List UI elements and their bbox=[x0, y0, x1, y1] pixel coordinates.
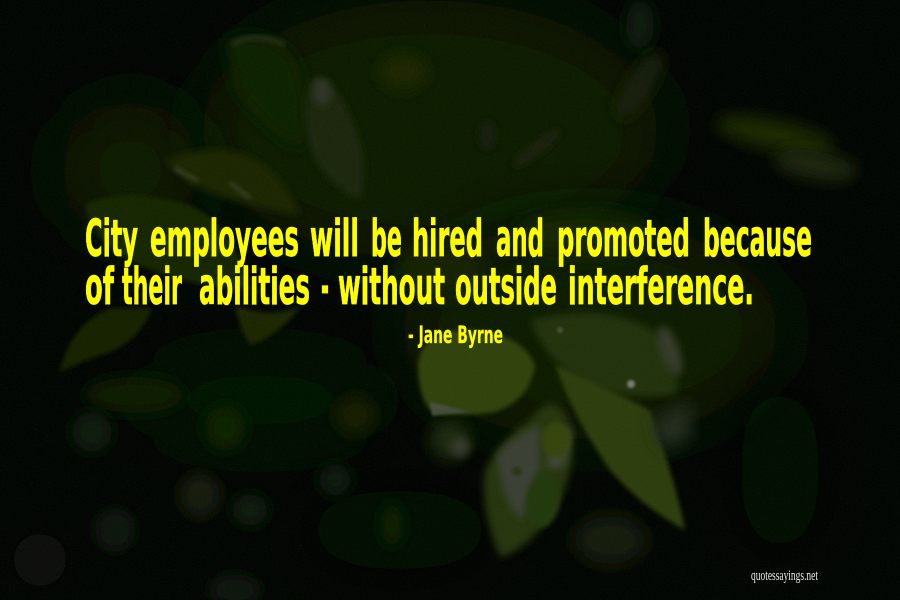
attribution: - Jane Byrne bbox=[408, 321, 503, 349]
watermark: quotessayings.net bbox=[751, 568, 819, 584]
quote text: City bbox=[85, 210, 138, 269]
quote text: hired bbox=[412, 210, 483, 269]
quote text: without bbox=[338, 258, 445, 317]
quote text: employees bbox=[150, 210, 299, 269]
background: upper left leaves bbox=[60, 36, 427, 413]
background: out-of-focus lower blobs bbox=[14, 395, 402, 600]
quote text: promoted bbox=[557, 210, 690, 269]
quote text: - bbox=[321, 258, 329, 317]
quote text: of bbox=[85, 258, 114, 317]
quote text: and bbox=[496, 210, 544, 269]
quote text: outside bbox=[455, 258, 557, 317]
quote text bbox=[85, 210, 812, 317]
quote text: their bbox=[122, 258, 182, 317]
quote text: abilities bbox=[199, 258, 310, 317]
background: lower right leaves with water drops bbox=[418, 313, 690, 564]
quote text: be bbox=[371, 210, 402, 269]
quote text: will bbox=[310, 210, 359, 269]
